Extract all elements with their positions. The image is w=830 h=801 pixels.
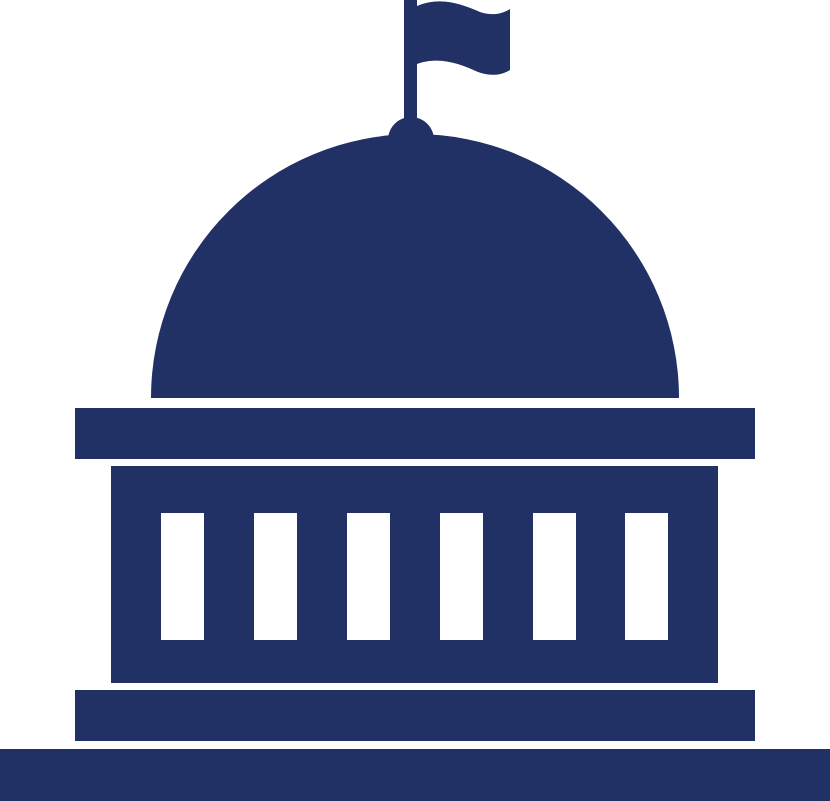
ground step xyxy=(0,749,830,801)
dome xyxy=(151,134,679,398)
flag xyxy=(417,1,510,75)
flag pole xyxy=(404,0,417,128)
dome knob xyxy=(388,117,434,163)
entablature xyxy=(75,408,755,459)
base step xyxy=(75,690,755,741)
colonnade body xyxy=(111,466,718,683)
